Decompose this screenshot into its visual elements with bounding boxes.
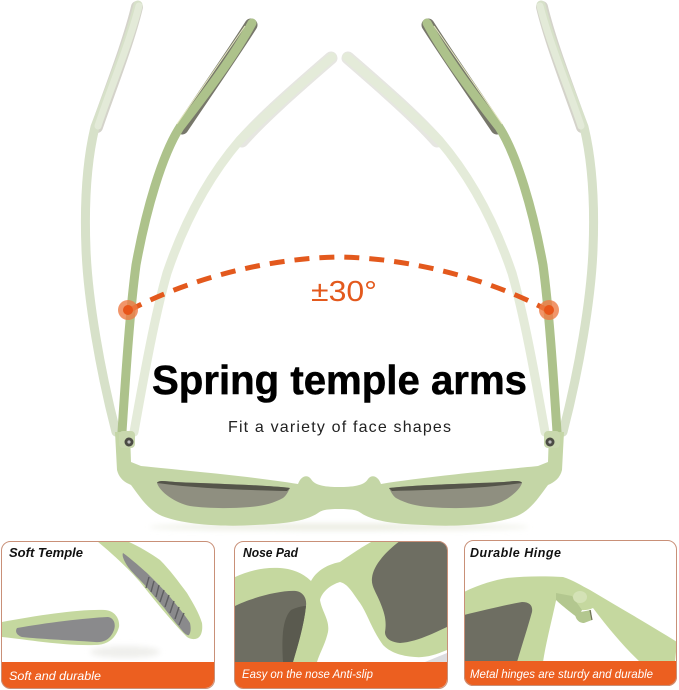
hinge (556, 591, 592, 623)
left temple arms (85, 5, 332, 432)
lens (464, 602, 532, 662)
front frame body (115, 432, 564, 526)
caption: Metal hinges are sturdy and durable (470, 667, 653, 681)
caption bar (464, 661, 677, 686)
caption: Soft and durable (9, 669, 101, 683)
panel: nose pad (233, 541, 448, 688)
panel heading: Soft Temple (9, 546, 83, 560)
caption: Easy on the nose Anti-slip (242, 667, 373, 681)
right hinge screw (544, 431, 560, 448)
caption bar (1, 662, 214, 688)
glasses frame (115, 431, 564, 530)
title: Spring temple arms (152, 357, 527, 403)
panel: soft temple (1, 541, 214, 688)
frame (233, 541, 447, 662)
frame (464, 576, 677, 662)
left pivot marker (118, 300, 138, 320)
right temple arms (347, 5, 594, 432)
angle label: ±30° (311, 276, 377, 308)
right lens (372, 541, 447, 643)
subtitle: Fit a variety of face shapes (228, 419, 451, 436)
right lens (389, 481, 522, 508)
right pivot marker (539, 300, 559, 320)
left hinge screw (119, 431, 135, 448)
upper temple arm (97, 541, 202, 639)
left lens (157, 481, 290, 508)
caption bar (234, 662, 447, 688)
panel: durable hinge (464, 540, 677, 686)
left lens (233, 591, 306, 662)
panel heading: Durable Hinge (470, 546, 561, 560)
lower temple arm (2, 610, 119, 645)
angle arc (118, 257, 559, 320)
frame shadow (149, 524, 529, 530)
panel heading: Nose Pad (243, 546, 298, 560)
